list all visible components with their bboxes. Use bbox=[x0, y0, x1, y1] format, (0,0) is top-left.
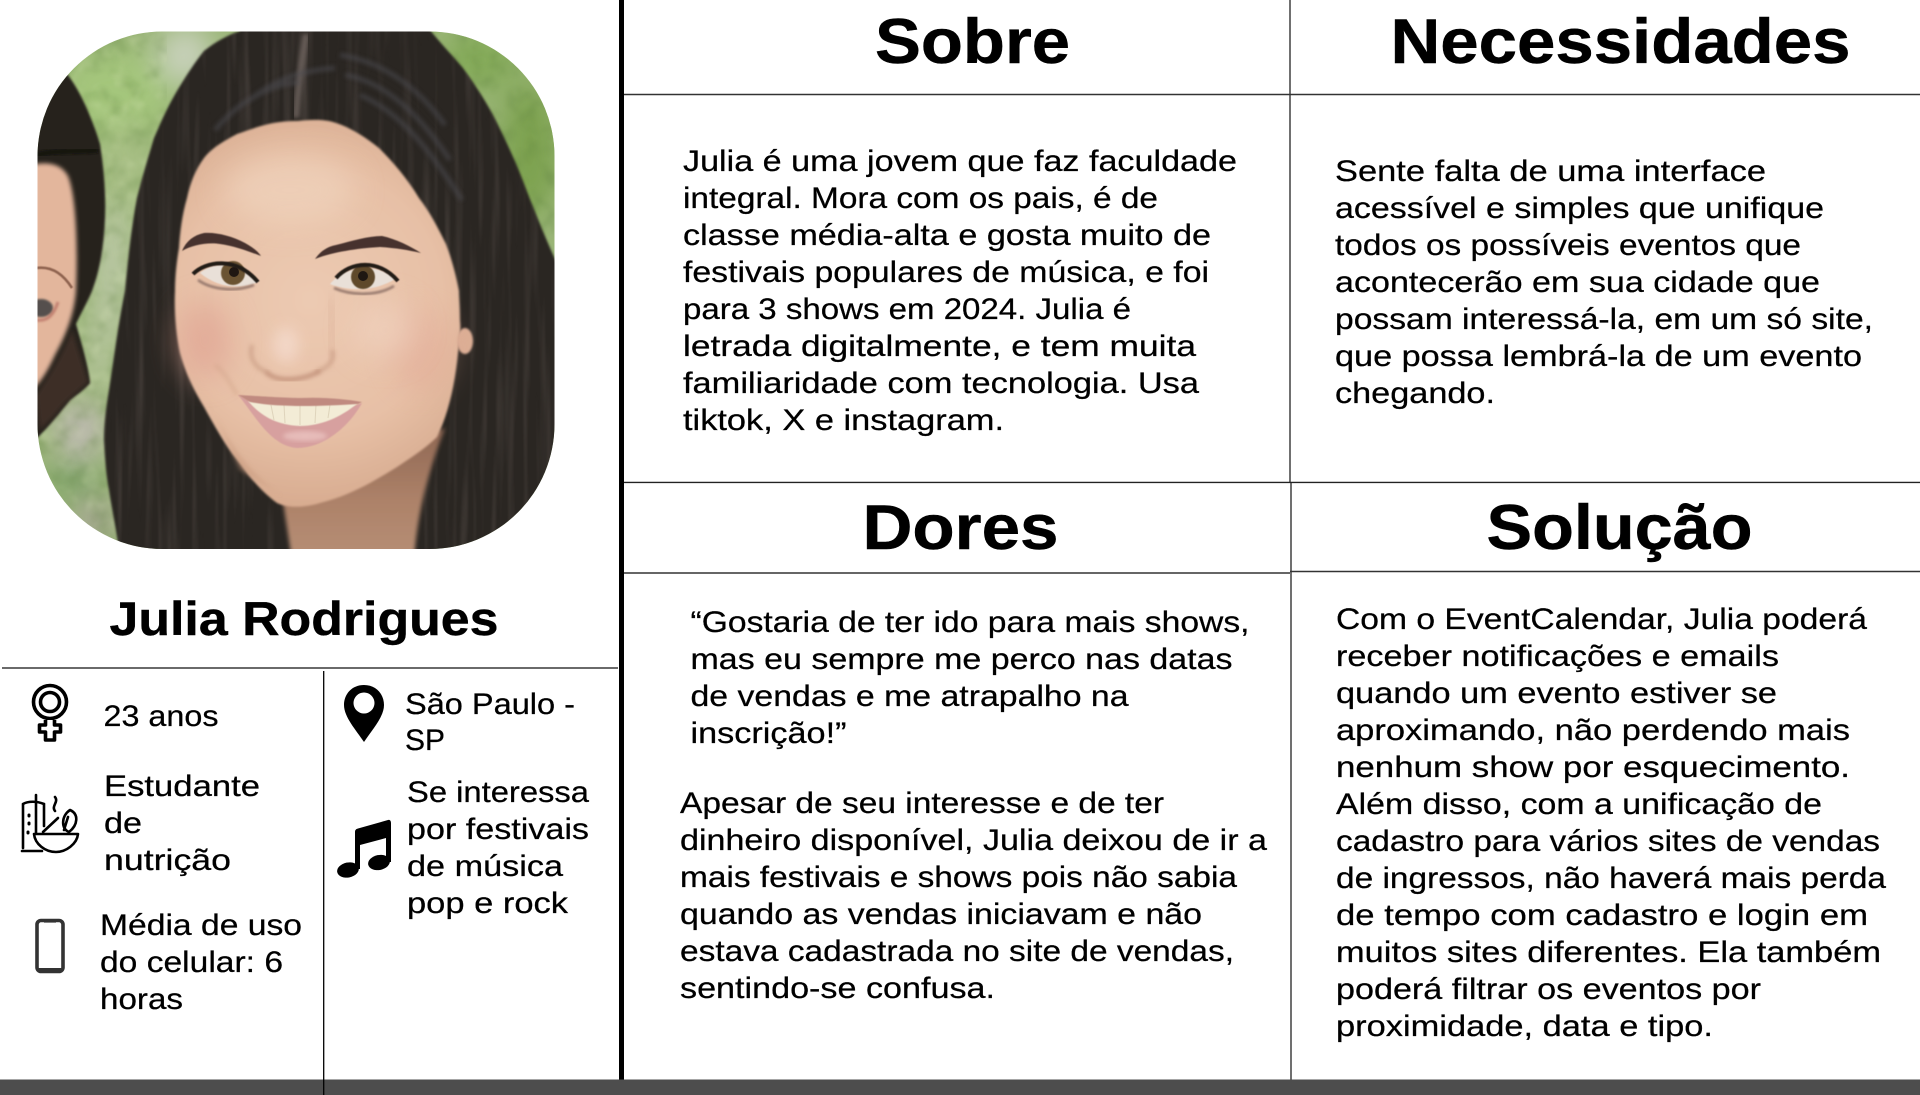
text: Solução body: aproximando, não perdendo mais bbox=[1336, 714, 1850, 747]
panel: Solução bbox=[1336, 493, 1886, 1043]
text: quote: mas eu sempre me perco nas datas bbox=[690, 643, 1232, 676]
cheeks and shadows bbox=[179, 302, 231, 378]
interests text: por festivais bbox=[407, 813, 589, 846]
text: Necessidades body: acontecerão em sua cidade que bbox=[1335, 266, 1820, 299]
text: Solução body: muitos sites diferentes. Ela também bbox=[1336, 936, 1881, 969]
text: Necessidades body: possam interessá-la, em um só site, bbox=[1335, 303, 1873, 336]
phone use text: do celular: 6 bbox=[100, 946, 283, 979]
neck bbox=[282, 428, 445, 560]
interests text: Se interessa bbox=[407, 776, 589, 809]
occupation item bbox=[22, 770, 260, 877]
panel: Sobre bbox=[683, 7, 1237, 437]
text: Dores body: estava cadastrada no site de vendas, bbox=[680, 935, 1234, 968]
text: quote bbox=[690, 606, 1250, 750]
main hair bbox=[104, 25, 560, 555]
text: Sobre body: tiktok, X e instagram. bbox=[683, 404, 1004, 437]
eyebrows bbox=[182, 233, 261, 256]
interests text: de música bbox=[407, 850, 563, 883]
face bbox=[175, 120, 460, 507]
left eye bbox=[200, 265, 258, 287]
text: Sobre body: familiaridade com tecnologia. Usa bbox=[683, 367, 1199, 400]
age item bbox=[34, 686, 218, 740]
text: Solução body: proximidade, data e tipo. bbox=[1336, 1010, 1713, 1043]
text: Dores body: dinheiro disponível, Julia deixou de ir a bbox=[680, 824, 1267, 857]
location text: SP bbox=[405, 724, 445, 757]
heading: Necessidades: Necessidades bbox=[1390, 7, 1850, 77]
photo of Julia bbox=[29, 25, 560, 560]
bottom bar bbox=[0, 1080, 1920, 1095]
occupation text: nutrição bbox=[104, 844, 231, 877]
ear bbox=[457, 328, 473, 354]
icon: nutrition food bbox=[22, 795, 78, 852]
heading: Sobre: Sobre bbox=[875, 7, 1070, 77]
text: Necessidades body bbox=[1335, 155, 1873, 410]
text: Solução body: Além disso, com a unificação de bbox=[1336, 788, 1822, 821]
text: Sobre body bbox=[683, 145, 1237, 437]
location text bbox=[405, 688, 575, 757]
text: Solução body: Com o EventCalendar, Julia poderá bbox=[1336, 603, 1867, 636]
age text: 23 anos bbox=[104, 700, 218, 733]
left woman bbox=[30, 74, 105, 445]
text: Dores body bbox=[680, 787, 1267, 1005]
text: Sobre body: Julia é uma jovem que faz faculdade bbox=[683, 145, 1237, 178]
text: Solução body: nenhum show por esquecimento. bbox=[1336, 751, 1850, 784]
text: Dores body: mais festivais e shows pois não sabia bbox=[680, 861, 1237, 894]
text: quote: “Gostaria de ter ido para mais shows, bbox=[690, 606, 1250, 639]
interests text: pop e rock bbox=[407, 887, 569, 920]
text: Necessidades body: que possa lembrá-la de um evento bbox=[1335, 340, 1862, 373]
text: quote: inscrição!” bbox=[690, 717, 846, 750]
icon: smartphone bbox=[37, 920, 63, 972]
text: Solução body: de ingressos, não haverá mais perda bbox=[1336, 862, 1886, 895]
text: Necessidades body: todos os possíveis eventos que bbox=[1335, 229, 1801, 262]
text: Necessidades body: chegando. bbox=[1335, 377, 1495, 410]
text: Sobre body: festivais populares de música, e foi bbox=[683, 256, 1209, 289]
phone use text: Média de uso bbox=[100, 909, 302, 942]
icon: map pin bbox=[344, 685, 384, 742]
text: Solução body bbox=[1336, 603, 1886, 1043]
text: Sobre body: para 3 shows em 2024. Julia é bbox=[683, 293, 1131, 326]
text: Dores body: Apesar de seu interesse e de ter bbox=[680, 787, 1164, 820]
heading: Dores: Dores bbox=[862, 493, 1058, 563]
text: Solução body: de tempo com cadastro e login em bbox=[1336, 899, 1868, 932]
text: Solução body: receber notificações e emails bbox=[1336, 640, 1779, 673]
name: Julia Rodrigues bbox=[110, 592, 498, 645]
nose bbox=[330, 300, 333, 358]
occupation text: de bbox=[104, 807, 142, 840]
mouth bbox=[238, 395, 362, 448]
icon: music note bbox=[336, 820, 391, 880]
text: Dores body: sentindo-se confusa. bbox=[680, 972, 995, 1005]
interests item bbox=[336, 776, 589, 920]
occupation text: Estudante bbox=[104, 770, 260, 803]
interests text bbox=[407, 776, 589, 920]
phone use item bbox=[37, 909, 302, 1016]
heading: Solução: Solução bbox=[1486, 493, 1752, 563]
text: Solução body: cadastro para vários sites de vendas bbox=[1336, 825, 1880, 858]
text: Sobre body: letrada digitalmente, e tem muita bbox=[683, 330, 1196, 363]
text: Solução body: poderá filtrar os eventos por bbox=[1336, 973, 1761, 1006]
panel: Dores bbox=[680, 493, 1267, 1005]
location item bbox=[344, 685, 575, 757]
right eye bbox=[330, 268, 395, 289]
icon: female symbol bbox=[34, 686, 66, 740]
location text: São Paulo - bbox=[405, 688, 575, 721]
text: Dores body: quando as vendas iniciavam e não bbox=[680, 898, 1202, 931]
text: Necessidades body: acessível e simples que unifique bbox=[1335, 192, 1824, 225]
text: Necessidades body: Sente falta de uma interface bbox=[1335, 155, 1766, 188]
panel: persona profile bbox=[22, 25, 589, 1016]
text: Sobre body: classe média-alta e gosta muito de bbox=[683, 219, 1211, 252]
text: Solução body: quando um evento estiver se bbox=[1336, 677, 1777, 710]
phone use text: horas bbox=[100, 983, 183, 1016]
text: quote: de vendas e me atrapalho na bbox=[690, 680, 1129, 713]
phone use text bbox=[100, 909, 302, 1016]
text: Sobre body: integral. Mora com os pais, é de bbox=[683, 182, 1158, 215]
panel: Necessidades bbox=[1335, 7, 1873, 410]
occupation text bbox=[104, 770, 260, 877]
